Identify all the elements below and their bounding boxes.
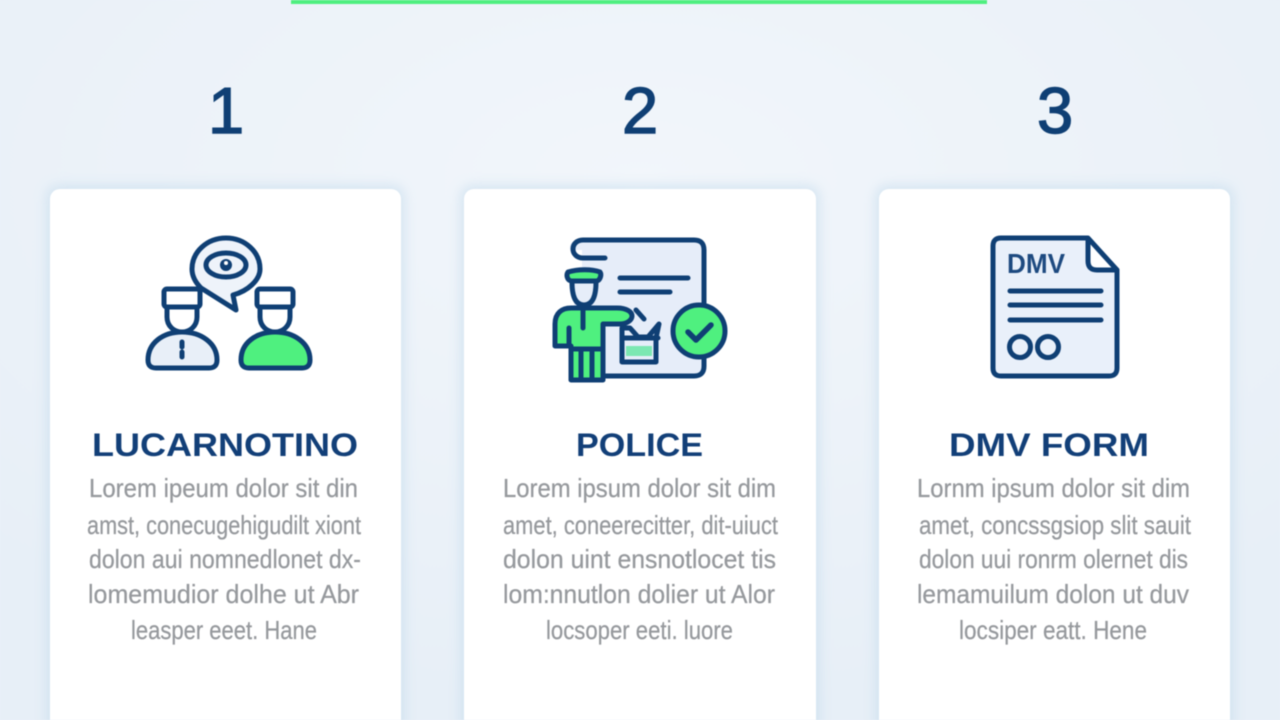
body text: step 3: amet, concssgsiop slit sauit (919, 510, 1192, 540)
body text: step 2: amet, coneerecitter, dit-uiuct (503, 510, 779, 540)
body text: step 1 (87, 473, 362, 645)
body text: step 3: locsiper eatt. Hene (959, 615, 1147, 645)
heading: Police: POLICE (576, 427, 703, 463)
panel: step 3 card (875, 185, 1234, 720)
panel: step 1 card (46, 185, 405, 720)
body text: step 2: lom:nnutlon dolier ut Alor (503, 579, 775, 609)
body text: step 1: lomemudior dolhe ut Abr (88, 579, 359, 609)
body text: step 2: Lorem ipsum dolor sit dim (503, 473, 776, 503)
body text: step 3: lemamuilum dolon ut duv (917, 579, 1189, 609)
icon: two officers with speech bubble (148, 238, 310, 368)
body text: step 1: Lorem ipeum dolor sit din (89, 473, 358, 503)
heading: DMV Form: DMV FORM (949, 427, 1149, 463)
step number 2: 2 (622, 74, 658, 147)
icon: DMV form document (993, 238, 1117, 376)
heading: Lucarnotino: LUCARNOTINO (92, 427, 358, 463)
body text: step 1: leasper eeet. Hane (131, 615, 317, 645)
step number 3: 3 (1037, 74, 1073, 147)
body text: step 2: dolon uint ensnotlocet tis (503, 544, 776, 574)
body text: step 1: amst, conecugehigudilt xiont (87, 510, 362, 540)
icon: DMV form document: DMV (1007, 248, 1065, 279)
body text: step 3 (917, 473, 1192, 645)
step number 1: 1 (208, 74, 244, 147)
body text: step 3: dolon uui ronrm olernet dis (919, 544, 1188, 574)
body text: step 1: dolon aui nomnedlonet dx- (89, 544, 361, 574)
body text: step 2: locsoper eeti. luore (546, 615, 733, 645)
icon: police officer with document and check (555, 240, 725, 380)
green top bar (291, 0, 987, 4)
body text: step 3: Lornm ipsum dolor sit dim (917, 473, 1190, 503)
panel: step 2 card (460, 185, 820, 720)
body text: step 2 (503, 473, 779, 645)
